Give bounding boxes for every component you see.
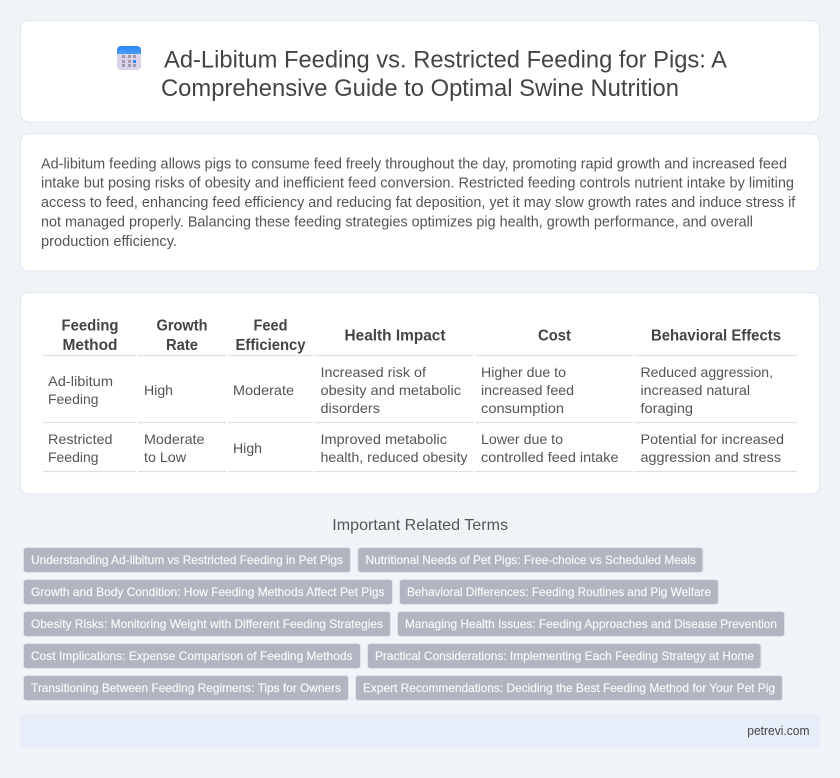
tag row 5 (24, 676, 782, 700)
table row: restricted feeding: Lower due to (481, 431, 563, 447)
table row: restricted feeding: to Low (144, 449, 187, 465)
table header row: Feeding (62, 318, 118, 335)
intro paragraph: Ad-libitum feeding allows pigs to consume feed freely throughout the day, promoting rapid growth and increased feed (41, 156, 787, 172)
tag row 3: Managing Health Issues: Feeding Approaches and Disease Prevention (405, 617, 777, 631)
tag row 4: Practical Considerations: Implementing Each Feeding Strategy at Home (375, 649, 754, 663)
tag row 2: Growth and Body Condition: How Feeding Methods Affect Pet Pigs (31, 585, 384, 599)
table row: ad-libitum feeding: disorders (320, 400, 380, 416)
tag row 1 (24, 548, 703, 572)
table header row: Feed (254, 318, 288, 335)
tag row 2 (24, 580, 718, 604)
table header row: Behavioral Effects (651, 328, 781, 345)
table row: ad-libitum feeding: High (144, 382, 173, 398)
table row: restricted feeding: High (233, 440, 262, 456)
title: Ad-Libitum Feeding vs. Restricted Feeding for Pigs: A (164, 46, 727, 74)
table row: restricted feeding: Restricted (48, 431, 112, 447)
table header row: Growth (156, 318, 208, 335)
footer: petrevi.com (747, 723, 810, 738)
heading: important related terms: Important Related Terms (332, 517, 508, 534)
table row: restricted feeding: controlled feed intake (481, 449, 619, 465)
tag row 2: Behavioral Differences: Feeding Routines and Pig Welfare (407, 585, 711, 599)
table row: ad-libitum feeding: increased feed (481, 382, 574, 398)
table row: restricted feeding: Moderate (144, 431, 205, 447)
tag row 1: Understanding Ad-libitum vs Restricted Feeding in Pet Pigs (31, 553, 343, 567)
table row: ad-libitum feeding: Moderate (233, 382, 294, 398)
table row: restricted feeding: health, reduced obesity (320, 449, 468, 465)
panel: title header (20, 20, 820, 122)
table row: ad-libitum feeding: Reduced aggression, (640, 364, 773, 380)
tag row 5: Expert Recommendations: Deciding the Best Feeding Method for Your Pet Pig (363, 681, 775, 695)
icon: calendar (117, 46, 141, 70)
table row: ad-libitum feeding: increased natural (640, 382, 750, 398)
tag row 3 (24, 612, 784, 636)
table rules (43, 356, 797, 472)
intro paragraph: production efficiency. (41, 234, 177, 250)
intro paragraph: access to feed, enhancing feed efficiency and reducing fat deposition, yet it may slow growth rates and induce stress if (41, 195, 796, 211)
tag row 5: Transitioning Between Feeding Regimens: Tips for Owners (31, 681, 341, 695)
table header row: Method (62, 337, 118, 354)
table row: restricted feeding: Feeding (48, 449, 98, 465)
table row: ad-libitum feeding (48, 364, 773, 416)
table header row: Efficiency (236, 337, 306, 354)
table row: ad-libitum feeding: foraging (640, 400, 693, 416)
table row: restricted feeding (48, 431, 784, 465)
footer (20, 714, 820, 748)
tag row 4: Cost Implications: Expense Comparison of Feeding Methods (31, 649, 352, 663)
panel: related term tags (24, 548, 784, 700)
table row: ad-libitum feeding: Feeding (48, 391, 98, 407)
table header row: Cost (538, 328, 572, 345)
table row: ad-libitum feeding: obesity and metabolic (320, 382, 461, 398)
tag row 1: Nutritional Needs of Pet Pigs: Free-choice vs Scheduled Meals (366, 553, 696, 567)
table row: ad-libitum feeding: Increased risk of (320, 364, 426, 380)
intro paragraph: intake but posing risks of obesity and inefficient feed conversion. Restricted feeding controls nutrient intake by limiting (41, 176, 794, 192)
table row: restricted feeding: Improved metabolic (320, 431, 447, 447)
table row: ad-libitum feeding: Higher due to (481, 364, 566, 380)
title (161, 46, 727, 102)
tag row 3: Obesity Risks: Monitoring Weight with Different Feeding Strategies (31, 617, 383, 631)
intro paragraph (41, 156, 796, 250)
table header row (62, 318, 781, 354)
table header row: Health Impact (344, 328, 446, 345)
table row: restricted feeding: Potential for increased (640, 431, 784, 447)
tag row 4 (24, 644, 761, 668)
title: Comprehensive Guide to Optimal Swine Nutrition (161, 75, 679, 102)
table row: ad-libitum feeding: consumption (481, 400, 564, 416)
intro paragraph: not managed properly. Balancing these feeding strategies optimizes pig health, growth performance, and overall (41, 214, 753, 230)
panel: comparison table (20, 292, 820, 494)
table row: restricted feeding: aggression and stress (640, 449, 781, 465)
table header row: Rate (166, 337, 198, 354)
table row: ad-libitum feeding: Ad-libitum (48, 373, 113, 389)
panel: introduction (20, 134, 820, 271)
